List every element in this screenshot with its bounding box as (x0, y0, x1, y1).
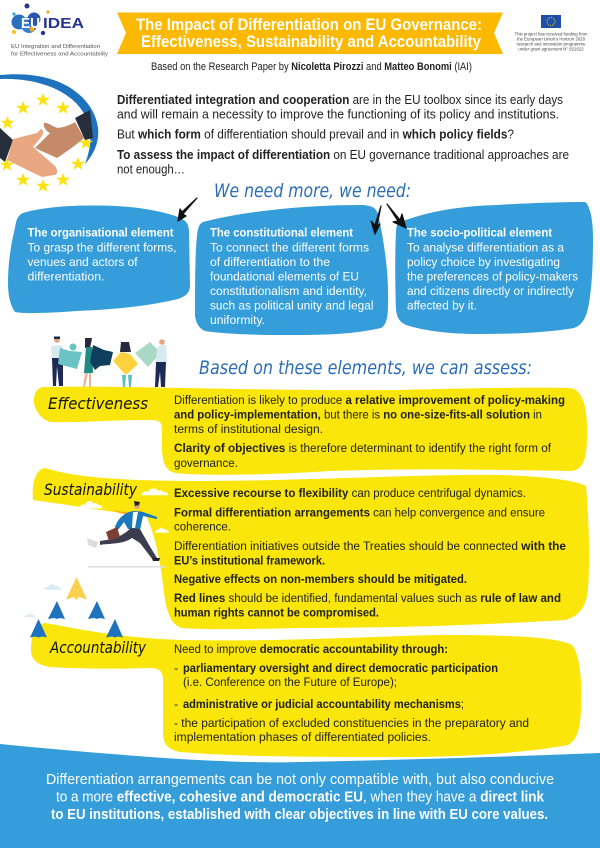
panel: sustainability (33, 468, 589, 629)
funding notice with EU flag: research and innovation programme (516, 42, 586, 46)
panel: effectiveness: and policy-implementation, but there is no one-size-fits-all solution in (174, 408, 542, 422)
panel: sustainability: Negative effects on non-members should be mitigated. (174, 572, 467, 586)
illustration: running businessman with clouds (80, 488, 169, 568)
intro text: Differentiated integration and cooperation are in the EU toolbox since its early days (117, 92, 563, 107)
panel: organisational element (8, 206, 190, 313)
intro text: and will remain a necessity to improve the functioning of its policy and institutions. (117, 106, 559, 122)
panel: sustainability: Sustainability (44, 480, 137, 499)
panel: accountability: Accountability (49, 638, 146, 657)
illustration: paper planes (24, 577, 123, 638)
panel: constitutional element: constitutionalism and identity, (210, 284, 367, 298)
logo: EUIDEA: IDEA (43, 15, 84, 32)
panel: constitutional element: To connect the different forms (210, 240, 369, 254)
panel: constitutional element: of differentiation to the (210, 255, 330, 269)
panel: effectiveness: Clarity of objectives is therefore determinant to identify the right form of (174, 441, 552, 455)
panel: constitutional element (195, 205, 388, 335)
panel: accountability: administrative or judicial accountability mechanisms; (183, 697, 464, 711)
heading: based on these elements: Based on these elements, we can assess: (199, 357, 532, 379)
title banner: The Impact of Differentiation on EU Governance: (136, 15, 482, 34)
panel: constitutional element: The constitutional element (210, 226, 353, 240)
panel: constitutional element: such as political unity and legal (210, 298, 374, 312)
panel: sustainability: Red lines should be identified, fundamental values such as rule of law and (174, 591, 561, 605)
intro text (117, 92, 569, 176)
panel: socio-political element: and citizens directly or indirectly (407, 284, 575, 298)
panel: socio-political element: To analyse differentiation as a (407, 240, 564, 254)
panel: effectiveness (34, 387, 587, 475)
funding notice with EU flag: under grant agreement N° 822622 (518, 46, 584, 52)
footer banner: Differentiation arrangements can be not only compatible with, but also conducive (46, 771, 554, 788)
panel: sustainability: human rights cannot be compromised. (174, 606, 379, 620)
logo: EUIDEA: EU (21, 15, 40, 32)
panel: organisational element: The organisational element (28, 226, 174, 240)
panel: socio-political element: policy choice by investigating (407, 255, 560, 269)
icon: handshake with EU stars (0, 74, 98, 192)
panel: accountability: implementation phases of differentiated policies. (174, 730, 431, 744)
panel: sustainability: coherence. (174, 520, 231, 534)
title banner (117, 12, 503, 54)
panel: accountability: (i.e. Conference on the Future of Europe); (183, 675, 397, 689)
panel: organisational element: To grasp the different forms, (28, 240, 176, 254)
panel: organisational element: venues and actors of (28, 255, 138, 269)
panel: sustainability: Formal differentiation arrangements can help convergence and ensure (174, 506, 545, 520)
funding notice with EU flag: the European Union's Horizon 2020 (517, 36, 586, 42)
logo: EUIDEA: EU Integration and Differentiation (11, 44, 100, 50)
panel: constitutional element: foundational elements of EU (210, 270, 359, 284)
illustration: people with puzzle pieces (51, 336, 167, 388)
logo: EUIDEA (11, 4, 108, 58)
funding notice with EU flag: This project has received funding from (515, 32, 588, 36)
intro text: To assess the impact of differentiation on EU governance traditional approaches are (117, 147, 569, 162)
panel: organisational element: differentiation. (28, 270, 104, 284)
panel: accountability (31, 623, 581, 757)
panel: effectiveness: Effectiveness (48, 394, 148, 413)
panel: accountability: parliamentary oversight and direct democratic participation (183, 661, 498, 675)
heading: we need more: We need more, we need: (214, 180, 411, 202)
panel: effectiveness: governance. (174, 456, 238, 470)
intro text: not enough… (117, 162, 185, 176)
subtitle: authors: Based on the Research Paper by Nicoletta Pirozzi and Matteo Bonomi (IAI) (151, 61, 472, 73)
panel: sustainability: EU’s institutional framework. (174, 554, 325, 568)
intro text: But which form of differentiation should prevail and in which policy fields? (117, 126, 514, 142)
panel: constitutional element: uniformity. (210, 313, 265, 327)
footer banner (0, 744, 600, 848)
panel: socio-political element: affected by it. (407, 298, 477, 312)
title banner: Effectiveness, Sustainability and Accountability (141, 32, 482, 51)
panel: accountability: - (174, 697, 178, 711)
panel: sustainability: Excessive recourse to flexibility can produce centrifugal dynamics. (174, 486, 526, 500)
arrows from heading to panels (178, 198, 406, 234)
panel: socio-political element (395, 202, 593, 334)
panel: accountability: - (174, 661, 178, 675)
panel: effectiveness: terms of institutional design. (174, 422, 323, 436)
panel: accountability: Need to improve democratic accountability through: (174, 642, 448, 656)
panel: effectiveness: Differentiation is likely to produce a relative improvement of policy-making (174, 393, 565, 407)
panel: socio-political element: the preferences of policy-makers (407, 270, 578, 284)
footer banner: to a more effective, cohesive and democratic EU, when they have a direct link (56, 789, 544, 806)
logo: EUIDEA: for Effectiveness and Accountability (11, 52, 108, 58)
panel: sustainability: Differentiation initiatives outside the Treaties should be connected with the (174, 539, 566, 553)
panel: accountability: - the participation of excluded constituencies in the preparatory and (174, 716, 529, 730)
funding notice with EU flag (515, 15, 588, 52)
panel: socio-political element: The socio-political element (407, 226, 552, 240)
